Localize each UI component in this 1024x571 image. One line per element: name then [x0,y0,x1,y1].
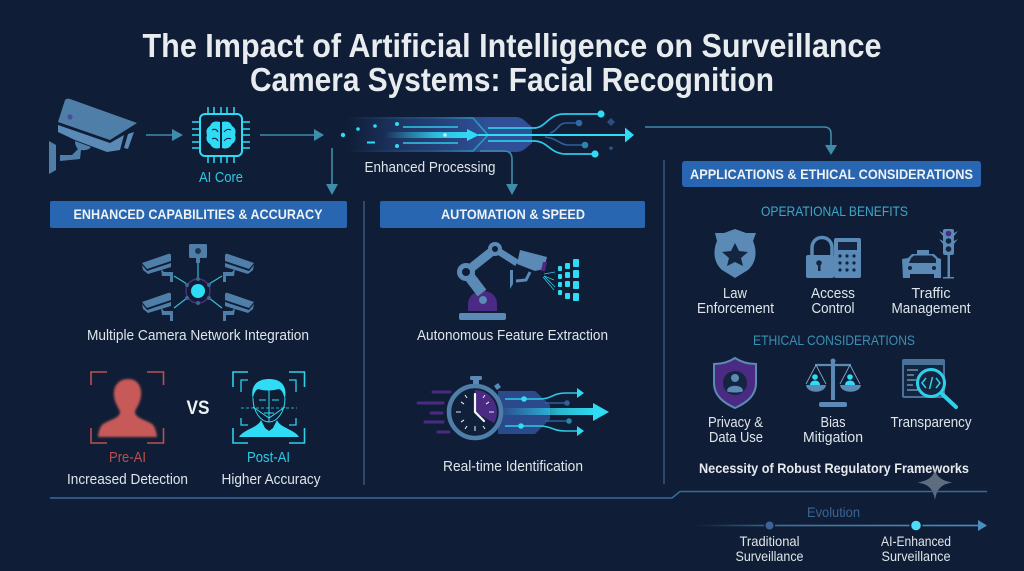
panel: applications and ethical considerations [682,161,981,476]
graphic: enhanced processing flow [341,110,634,158]
label: privacy and data use [708,415,763,446]
label: access control: Control [812,301,854,317]
subheading: ethical considerations: ETHICAL CONSIDERATIONS [753,332,915,348]
label: traffic management: Traffic [912,286,950,302]
heading: automation and speed: AUTOMATION & SPEED [441,206,585,222]
label: AI-enhanced surveillance [881,533,951,564]
arrow: camera to AI core [146,129,183,141]
label: multiple camera network integration: Multiple Camera Network Integration [87,328,309,344]
label: higher accuracy: Higher Accuracy [222,472,321,488]
icon: bias mitigation scales [806,358,861,407]
label: traffic management: Management [892,301,970,317]
decorative separator line with star [50,470,987,500]
label: Post-AI: Post-AI [247,450,290,466]
icon: multiple camera network [142,244,254,321]
heading: applications and ethical considerations: APPLICATIONS & ETHICAL CONSIDERATIONS [690,166,973,182]
label: Pre-AI: Pre-AI [109,450,146,466]
label: law enforcement: Law [723,286,747,302]
label: AI-enhanced surveillance: Surveillance [882,548,951,564]
title: Camera Systems: Facial Recognition [250,61,774,98]
label: traditional surveillance [736,533,804,564]
icon: access control lock and keypad [806,238,861,278]
subheading: operational benefits: OPERATIONAL BENEFITS [761,203,908,219]
label: privacy and data use: Privacy & [708,415,763,431]
label: AI Core: AI Core [199,170,243,186]
icon: transparency code magnifier [902,359,956,407]
label: law enforcement: Enforcement [697,301,774,317]
icon: privacy shield [714,358,756,408]
divider: left column [363,201,365,485]
text: VS: VS [186,398,210,419]
heading: enhanced capabilities [50,201,347,228]
title [142,27,882,98]
label: privacy and data use: Data Use [709,430,763,446]
arrow: processing to applications [645,127,837,155]
icon: post-AI facial mesh [233,372,304,443]
label: traditional surveillance: Traditional [740,533,800,549]
label: real-time identification: Real-time Identification [443,459,583,475]
divider: right column [663,160,665,484]
icon: stopwatch with speed arrows [418,376,609,438]
icon: pre-AI blurred face [91,372,164,443]
label: evolution: Evolution [807,504,860,520]
panel: automation and speed [380,201,645,475]
label: AI-enhanced surveillance: AI-Enhanced [881,533,951,549]
arrow: processing to automation [480,151,518,195]
panel: enhanced capabilities and accuracy [50,201,347,488]
icon: traffic management car and light [902,229,958,278]
label: law enforcement [697,286,774,317]
icon: AI core chip with brain [192,107,250,163]
timeline arrow [695,519,987,532]
label: traffic management [892,286,970,317]
timeline: evolution [695,504,987,564]
heading: automation and speed [380,201,645,228]
title: The Impact of Artificial Intelligence on Surveillance [142,27,882,64]
heading: applications and ethical considerations [682,161,981,187]
arrow: down to enhanced capabilities [326,148,338,195]
heading: enhanced capabilities: ENHANCED CAPABILITIES & ACCURACY [74,206,323,222]
label: access control: Access [811,286,855,302]
icon: robotic arm with camera [457,242,579,320]
label: bias mitigation [803,415,863,446]
label: autonomous feature extraction: Autonomous Feature Extraction [417,328,608,344]
text: necessity of robust regulatory frameworks: Necessity of Robust Regulatory Frameworks [699,460,969,476]
icon: surveillance camera [49,99,137,174]
icon: law enforcement shield [714,229,756,278]
arrow: AI core to processing [260,129,324,141]
label: access control [811,286,855,317]
label: bias mitigation: Mitigation [803,430,863,446]
label: bias mitigation: Bias [820,415,846,431]
label: Enhanced Processing: Enhanced Processing [364,159,496,176]
label: increased detection: Increased Detection [67,472,188,488]
label: traditional surveillance: Surveillance [736,548,804,564]
label: transparency: Transparency [890,415,972,431]
